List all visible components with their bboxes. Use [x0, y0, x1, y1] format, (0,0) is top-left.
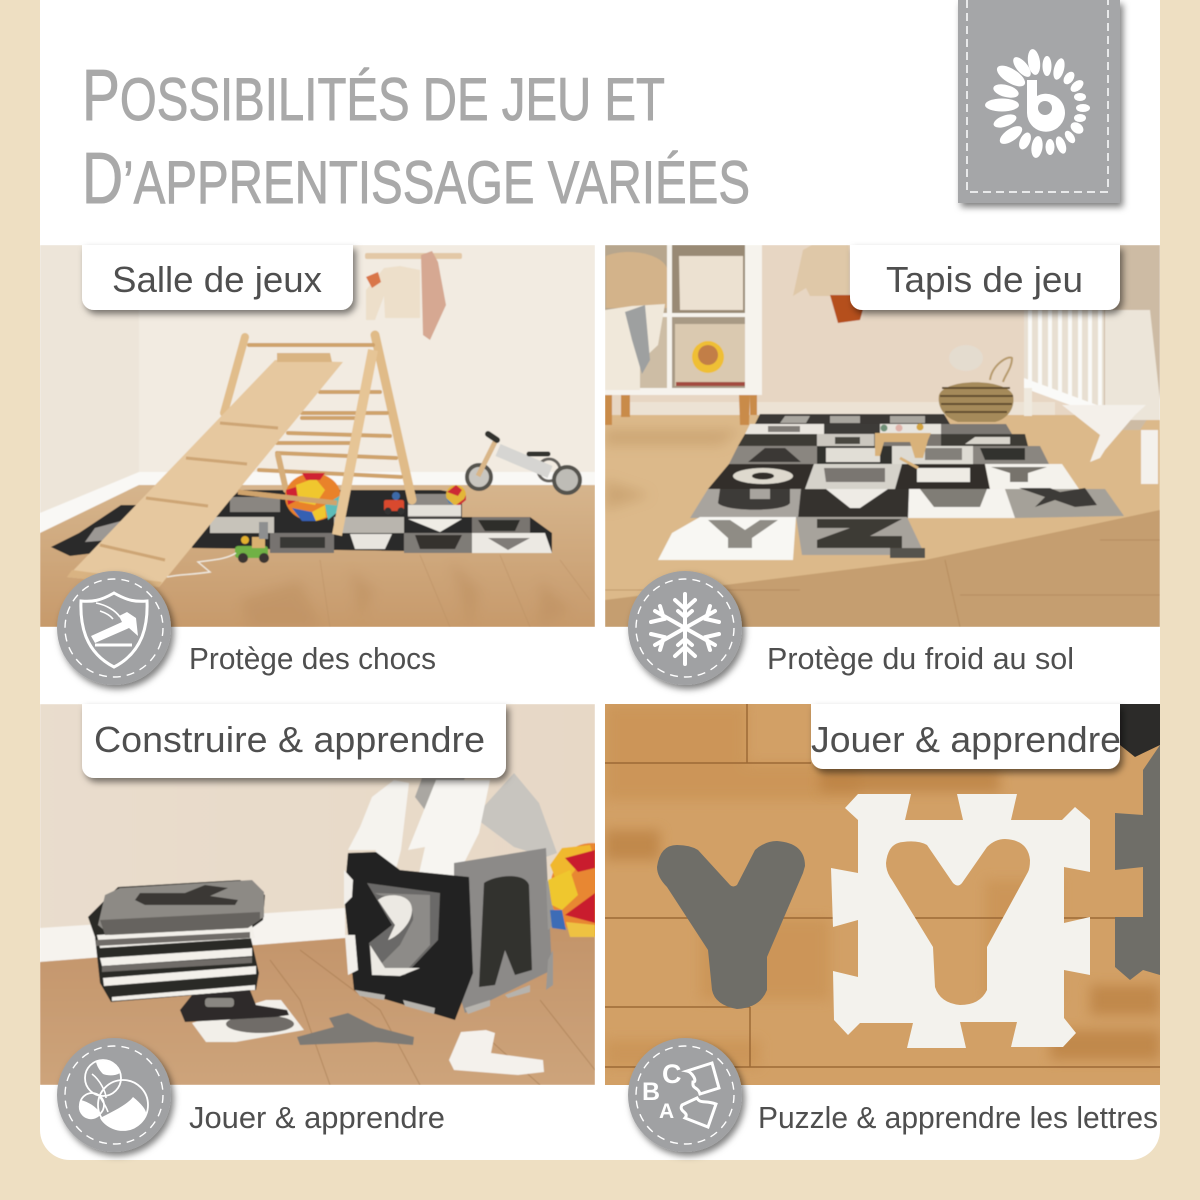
lion box: [675, 324, 745, 386]
caption: Jouer & apprendre: Jouer & apprendre: [189, 1100, 445, 1135]
tab: Construire & apprendre: Construire & apprendre: [94, 719, 485, 760]
caption: Protège des chocs: Protège des chocs: [189, 641, 436, 676]
puzzle cube: [344, 773, 557, 1020]
panel: build and learn photo: [40, 704, 634, 1085]
alphabet mat: [51, 490, 552, 556]
icon: letters and puzzle: C: [662, 1059, 682, 1089]
colourful ball: [285, 473, 341, 521]
storage basket: [606, 252, 667, 308]
alphabet mat: [658, 414, 1124, 560]
small ball: [446, 485, 466, 505]
wooden rack with clothes: [365, 251, 462, 340]
row U V W X: [690, 489, 801, 518]
white Y puzzle tile: [831, 794, 1090, 1048]
woven basket with toy: [939, 345, 1014, 422]
row A B C: [755, 414, 950, 424]
caption: Puzzle & apprendre les lettres: Puzzle & apprendre les lettres: [758, 1100, 1158, 1135]
floor: [605, 415, 1160, 627]
black corner tile: [1120, 704, 1160, 757]
baby cot: [1024, 245, 1160, 484]
stacked puzzle mats: [88, 880, 265, 1002]
row Y Z: [658, 517, 796, 560]
brand tag with logo: [958, 0, 1120, 203]
folded blanket: [605, 304, 665, 390]
scattered letter pieces: [180, 990, 544, 1075]
grey Y letter: [657, 841, 805, 1009]
icon: logo letter b: [1027, 80, 1065, 132]
panel: jigsaw Y photo: [605, 704, 1160, 1085]
fabric box: [679, 256, 743, 310]
panel: playroom photo: [40, 245, 595, 627]
title: D’APPRENTISSAGE VARIÉES: [82, 139, 750, 219]
standing letter pieces: [478, 773, 557, 857]
row I J K L: [738, 434, 817, 446]
wooden toy: [875, 424, 931, 468]
row Q R S T: [708, 464, 814, 489]
tab: Jouer & apprendre: Jouer & apprendre: [811, 719, 1121, 760]
wooden ramp: [67, 360, 343, 587]
tab: Construire & apprendre: [82, 704, 506, 778]
row E F G H: [745, 424, 824, 434]
panel: play mat photo: [605, 245, 1160, 627]
icon: sunflower logo: [985, 48, 1090, 159]
row M N O P: [729, 446, 817, 464]
baseboard: [625, 402, 1055, 415]
colourful ball: [548, 843, 634, 937]
icon: play balls: [57, 1038, 171, 1152]
tab: Jouer & apprendre: [811, 704, 1121, 769]
baseboard: [40, 908, 346, 962]
icon: snowflake: [628, 571, 742, 685]
toy car: [235, 522, 269, 563]
title: POSSIBILITÉS DE JEU ET: [82, 56, 665, 136]
hanging coat: [793, 245, 867, 323]
small red car: [384, 492, 404, 514]
climbing triangle: [224, 335, 412, 500]
icon: letters and puzzle: B: [642, 1078, 660, 1106]
floor: [40, 925, 595, 1085]
grey tile at right edge: [1115, 745, 1160, 980]
icon: letters and puzzle: [628, 1038, 742, 1152]
tab: Salle de jeux: Salle de jeux: [112, 259, 322, 300]
left wall corner: [40, 245, 139, 513]
white shelf: [605, 245, 762, 425]
tab: Tapis de jeu: Tapis de jeu: [886, 259, 1083, 300]
tab: Salle de jeux: [82, 245, 353, 310]
caption: Protège du froid au sol: Protège du froid au sol: [767, 641, 1074, 676]
title: [82, 56, 750, 219]
wooden floor: [40, 485, 595, 627]
icon: shield with hammer: [57, 571, 171, 685]
balance bike: [467, 434, 580, 493]
icon: letters and puzzle: A: [659, 1100, 674, 1123]
baseboard: [40, 472, 595, 533]
wood planks: [605, 704, 1160, 1067]
tab: Tapis de jeu: [850, 245, 1120, 310]
